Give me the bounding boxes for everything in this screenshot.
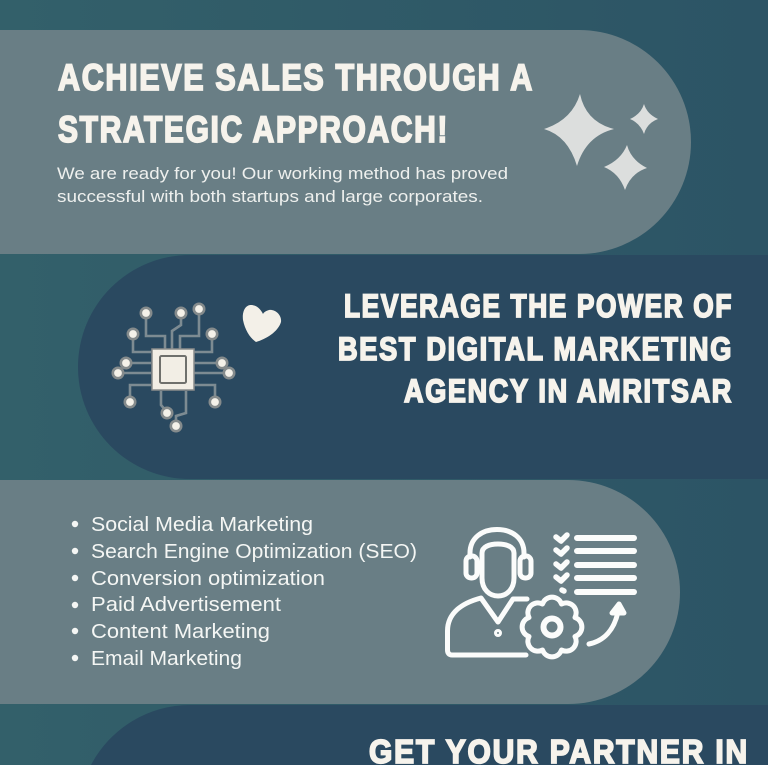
text: intro paragraph: successful with both startups and large corporates. — [57, 187, 483, 206]
text: intro paragraph: We are ready for you! Our working method has proved — [57, 164, 508, 183]
chip — [152, 349, 194, 390]
list: services: Search Engine Optimization (SEO) — [91, 541, 417, 563]
panel: services — [0, 480, 680, 704]
checklist — [556, 535, 634, 592]
agent shoulders — [448, 598, 527, 655]
heading: achieve sales: STRATEGIC APPROACH! — [58, 109, 449, 150]
list: services: Email Marketing — [91, 648, 242, 670]
list: services: Conversion optimization — [91, 568, 325, 590]
icon: support agent with checklist and gear — [448, 530, 634, 657]
list: services: Social Media Marketing — [91, 514, 313, 536]
circuit traces — [118, 309, 229, 425]
panel: get your partner — [91, 705, 768, 765]
list: services: Paid Advertisement — [91, 594, 281, 616]
icon: sparkles — [544, 94, 658, 190]
circuit nodes — [113, 304, 234, 431]
icon: heart — [243, 305, 281, 342]
list: services: Content Marketing — [91, 621, 270, 643]
arrow — [589, 612, 618, 644]
text: intro paragraph — [57, 164, 508, 206]
agent head and headset — [466, 530, 531, 596]
list: services — [72, 514, 417, 670]
heading: achieve sales — [58, 57, 534, 150]
heading: achieve sales: ACHIEVE SALES THROUGH A — [58, 57, 534, 98]
panel: leverage the power — [78, 255, 768, 479]
panel: achieve sales — [0, 30, 691, 254]
icon: circuit chip — [113, 304, 234, 431]
heading: leverage the power — [338, 288, 733, 409]
gear — [522, 597, 582, 657]
